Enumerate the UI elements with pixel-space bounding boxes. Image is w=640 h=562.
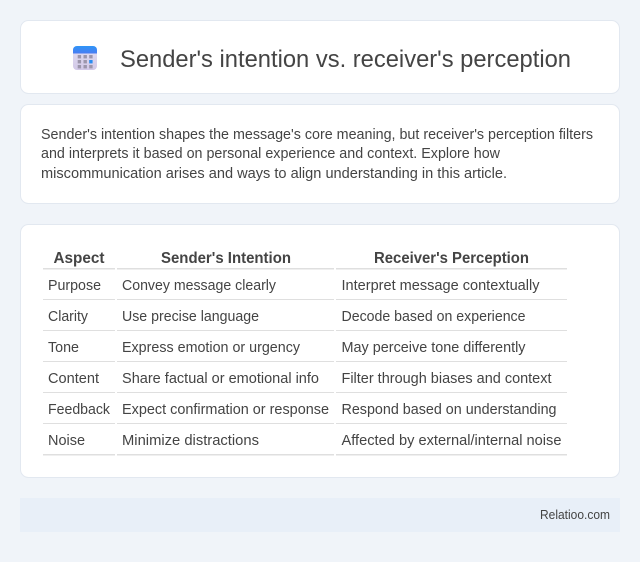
panel: intro text	[20, 104, 620, 204]
intro paragraph: and interprets it based on personal experience and context. Explore how	[41, 145, 500, 162]
panel: title card	[20, 20, 620, 94]
table row: clarity: Decode based on experience	[342, 309, 526, 325]
table row: purpose	[48, 278, 540, 294]
table row: clarity	[48, 309, 526, 325]
table row: purpose: Purpose	[48, 278, 101, 294]
intro paragraph: Sender's intention shapes the message's core meaning, but receiver's perception filters	[41, 126, 593, 143]
table row: tone: Express emotion or urgency	[122, 340, 301, 356]
table row: purpose: Convey message clearly	[122, 278, 277, 294]
table row: feedback: Respond based on understanding	[342, 402, 556, 418]
table row: clarity: Clarity	[48, 309, 89, 325]
footer text: Relatioo.com	[540, 508, 610, 522]
table row: content	[48, 371, 552, 387]
intro paragraph: miscommunication arises and ways to align understanding in this article.	[41, 165, 507, 182]
panel: comparison table	[20, 224, 620, 478]
table header: Aspect	[54, 250, 105, 267]
table row: feedback: Feedback	[48, 402, 111, 418]
title: Sender's intention vs. receiver's perception	[120, 46, 571, 73]
table header	[54, 250, 529, 267]
table row: tone: May perceive tone differently	[342, 340, 526, 356]
intro paragraph	[41, 126, 593, 182]
table row: feedback	[48, 402, 556, 418]
table row: noise: Minimize distractions	[122, 433, 259, 449]
icon: calendar	[73, 46, 97, 70]
table row: tone: Tone	[48, 340, 79, 356]
table row: noise	[48, 433, 562, 449]
table row: noise: Noise	[48, 433, 85, 449]
table grid lines	[43, 268, 567, 456]
footer bar	[20, 498, 620, 532]
table row: tone	[48, 340, 526, 356]
table row: clarity: Use precise language	[122, 309, 259, 325]
table row: noise: Affected by external/internal noise	[342, 433, 562, 449]
table row: content: Share factual or emotional info	[122, 371, 319, 387]
table row: feedback: Expect confirmation or response	[122, 402, 329, 418]
table header: Receiver's Perception	[374, 250, 529, 267]
table header: Sender's Intention	[161, 250, 291, 267]
table row: content: Content	[48, 371, 99, 387]
table row: content: Filter through biases and context	[342, 371, 552, 387]
table row: purpose: Interpret message contextually	[342, 278, 540, 294]
